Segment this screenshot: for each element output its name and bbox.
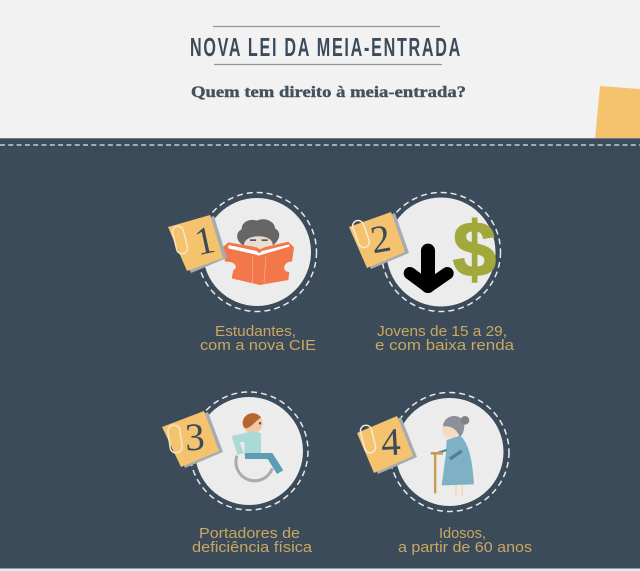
panel: idosos — [357, 392, 532, 556]
subtitle: Quem tem direito à meia-entrada? — [191, 84, 466, 101]
circle badge 4 — [390, 392, 509, 512]
icon: arrow down — [410, 251, 447, 287]
title: NOVA LEI DA MEIA-ENTRADA — [190, 32, 463, 62]
icon: dollar sign: $ — [453, 205, 496, 293]
caption 3: Portadores de — [199, 525, 300, 542]
panel: estudantes — [168, 192, 316, 354]
caption 1: Estudantes, — [215, 323, 296, 340]
note with number 1: 1 — [191, 218, 219, 264]
note with number 4: 4 — [380, 421, 402, 464]
caption 3: deficiência física — [192, 539, 313, 556]
caption 2: Jovens de 15 a 29, — [377, 323, 507, 340]
icon: student reading a book — [223, 219, 294, 285]
caption 2: e com baixa renda — [375, 337, 515, 354]
icon: elderly woman with cane — [431, 416, 474, 495]
header background — [0, 0, 640, 139]
note with number 2: 2 — [367, 217, 394, 262]
main dark panel — [0, 138, 640, 568]
icon: person in wheelchair — [232, 413, 283, 481]
caption 1: com a nova CIE — [200, 337, 316, 354]
note with number 3 — [162, 411, 223, 468]
panel: jovens de baixa renda — [349, 192, 515, 354]
panel: deficiencia fisica — [162, 392, 313, 556]
corner note: yellow sticky note — [595, 86, 640, 139]
caption 4: Idosos, — [439, 525, 486, 542]
note with number 4 — [357, 416, 417, 474]
circle badge 1 — [198, 192, 316, 312]
note with number 2 — [349, 212, 409, 269]
circle badge 2 — [382, 192, 500, 312]
circle badge 3 — [190, 392, 308, 510]
note with number 3: 3 — [184, 415, 206, 459]
note with number 1 — [168, 215, 227, 273]
caption 4: a partir de 60 anos — [398, 539, 532, 556]
